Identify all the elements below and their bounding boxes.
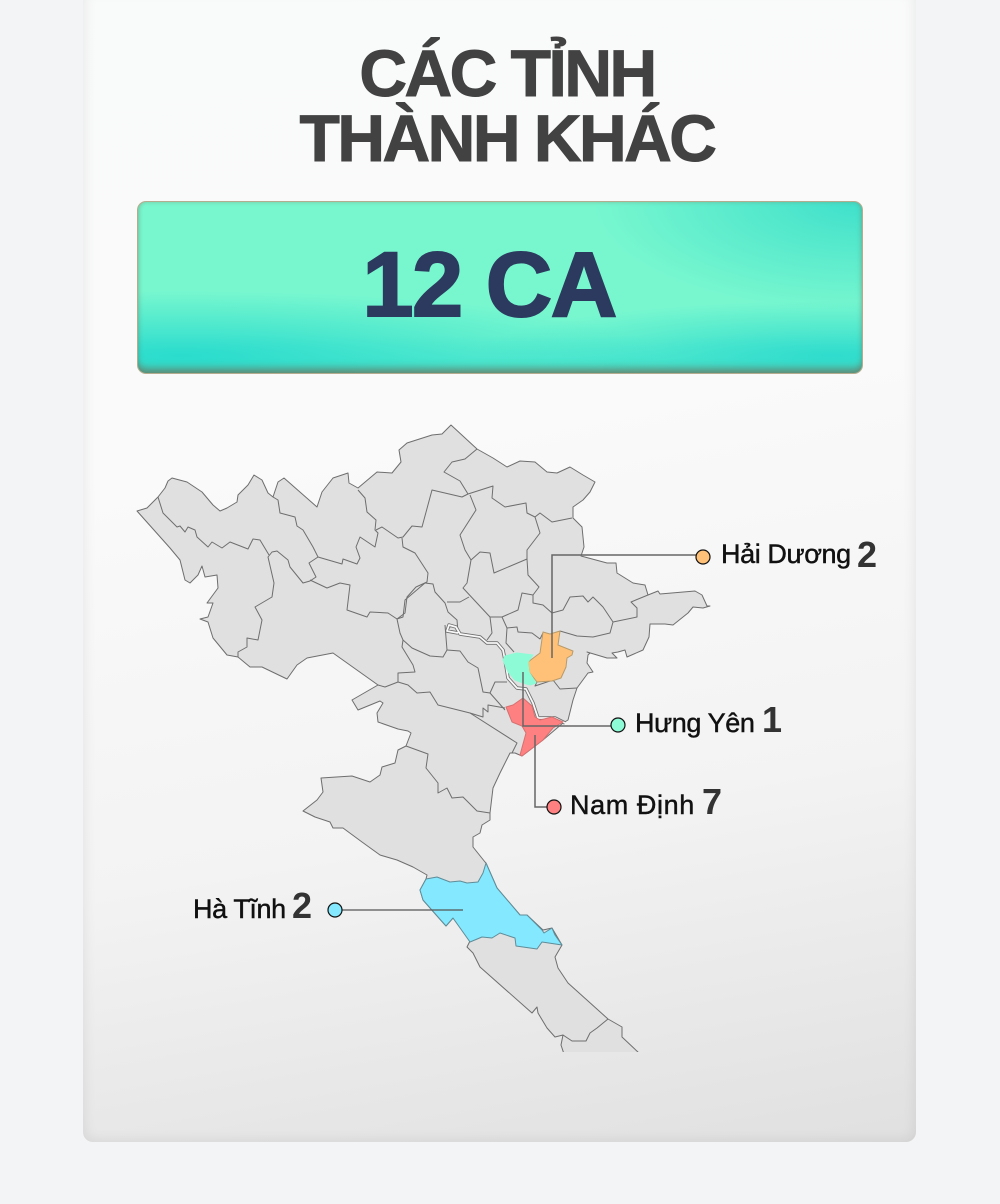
label: Nam Định 7 (570, 781, 722, 822)
case count number: 12 CA (362, 234, 616, 336)
label: Nam Định 7: Nam Định (570, 790, 695, 820)
province: Hưng Yên (503, 653, 536, 685)
leader line: Hà Tĩnh (341, 909, 463, 911)
callout: case count (137, 201, 863, 374)
land silhouette (137, 425, 710, 1054)
label: Hưng Yên 1: 1 (762, 699, 782, 740)
province: Nam Định (506, 698, 563, 756)
province: Hải Dương (528, 631, 573, 682)
leader line: Nam Định (535, 735, 548, 807)
label: Hà Tĩnh 2: Hà Tĩnh (193, 894, 286, 924)
province borders west (158, 497, 269, 555)
title: CÁC TỈNH (359, 36, 655, 110)
label: Nam Định 7: 7 (702, 781, 722, 822)
label: Hải Dương 2: 2 (857, 534, 877, 575)
label: Hưng Yên 1: Hưng Yên (635, 708, 754, 738)
marker: Nam Định (547, 800, 561, 814)
label: Hưng Yên 1 (635, 699, 782, 740)
label: Hải Dương 2 (721, 534, 877, 575)
province borders northeast (533, 595, 613, 637)
panel: card background (83, 0, 916, 1142)
title (300, 36, 716, 175)
map of northern provinces (137, 425, 710, 1054)
province borders centre (425, 583, 458, 632)
province borders north (468, 486, 572, 522)
title: THÀNH KHÁC (300, 101, 714, 175)
map with labels (136, 424, 876, 1052)
label: Hải Dương 2: Hải Dương (721, 539, 851, 569)
province: Hà Tĩnh (420, 863, 562, 949)
leader line: Hải Dương (552, 555, 697, 658)
leader line: Hưng Yên (523, 672, 612, 726)
label: Hà Tĩnh 2: 2 (292, 885, 312, 926)
label: Hà Tĩnh 2 (193, 885, 312, 926)
marker: Hà Tĩnh (328, 903, 342, 917)
marker: Hải Dương (696, 550, 710, 564)
province borders northwest (238, 497, 318, 657)
river (447, 625, 565, 723)
marker: Hưng Yên (611, 718, 625, 732)
province borders south (406, 746, 490, 813)
